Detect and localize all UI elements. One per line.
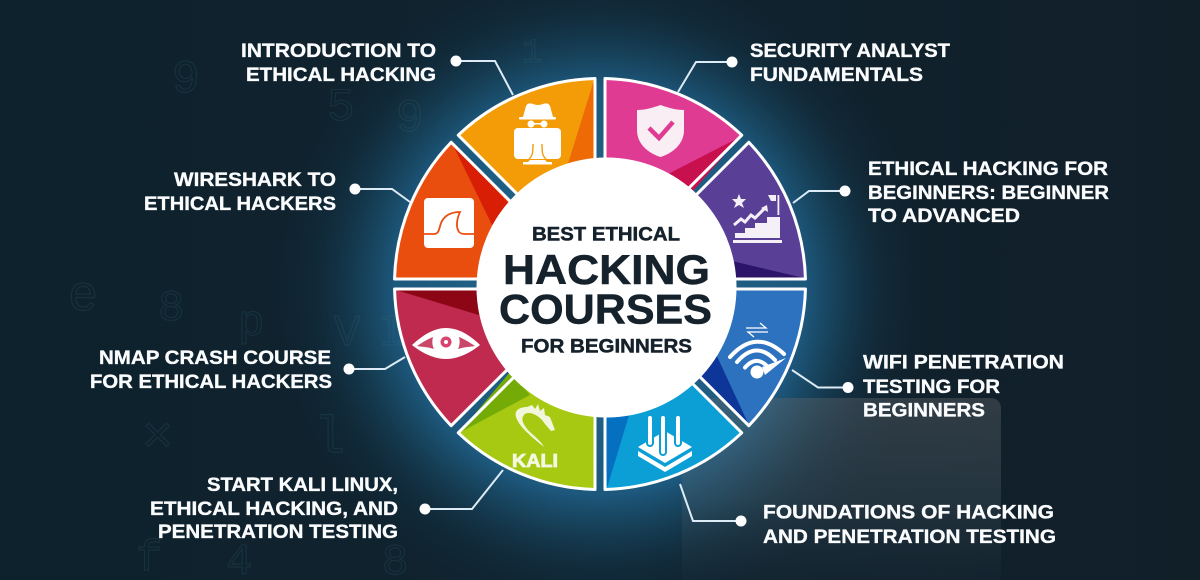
wedge: purple — [612, 142, 805, 279]
label: wifi: WIFI PENETRATION — [863, 352, 1064, 374]
background ghost characters: I — [378, 309, 404, 359]
label: ethical hacking for beginners: TO ADVANCED — [868, 205, 1020, 227]
background ghost characters — [68, 35, 542, 580]
background ghost characters: 5 — [327, 82, 355, 134]
connector: wireshark — [350, 184, 410, 202]
wedge: cyan — [605, 296, 742, 489]
wedge: pink — [605, 79, 742, 272]
icon: kali dragon and wordmark: KALI — [512, 451, 558, 471]
wedge: green — [458, 296, 595, 489]
label: introduction to ethical hacking: INTRODUCTION TO — [241, 40, 436, 62]
label: nmap: FOR ETHICAL HACKERS — [90, 371, 332, 393]
label: foundations: FOUNDATIONS OF HACKING — [763, 502, 1054, 524]
label: wireshark: WIRESHARK TO — [174, 169, 336, 191]
connector: security analyst fundamentals — [678, 56, 738, 92]
connector: nmap — [344, 357, 405, 374]
background ghost characters: 9 — [396, 93, 424, 145]
wedge: red — [395, 142, 588, 279]
background ghost characters: e — [68, 269, 98, 326]
background ghost characters: 1 — [522, 35, 542, 73]
icon: wireshark fin — [424, 198, 474, 248]
label: wifi: BEGINNERS — [863, 400, 985, 422]
label: security analyst: FUNDAMENTALS — [750, 64, 923, 86]
icon: hacker at monitor — [514, 103, 561, 164]
background ghost characters: × — [142, 409, 173, 468]
label: nmap: NMAP CRASH COURSE — [99, 347, 331, 369]
label: foundations: AND PENETRATION TESTING — [763, 526, 1056, 548]
icon: star and stairs progress — [732, 194, 782, 243]
label: introduction to ethical hacking — [241, 40, 436, 86]
icon: wifi speed gauge — [730, 323, 786, 378]
label: kali — [150, 474, 398, 543]
title: HACKING — [503, 246, 710, 293]
background ghost characters: 8 — [158, 284, 184, 334]
title: FOR BEGINNERS — [521, 336, 692, 358]
label: wireshark — [144, 169, 336, 215]
connector: introduction to ethical hacking — [450, 56, 513, 95]
connector: ethical hacking for beginners — [793, 186, 850, 203]
label: ethical hacking for beginners — [868, 158, 1109, 227]
label: nmap — [90, 347, 332, 393]
label: ethical hacking for beginners: BEGINNERS: BEGINNER — [868, 182, 1109, 204]
label: wireshark: ETHICAL HACKERS — [144, 193, 336, 215]
icon: eye — [412, 328, 480, 359]
wedge: blue — [612, 289, 805, 426]
background ghost characters: l — [314, 409, 345, 468]
label: kali: START KALI LINUX, — [207, 474, 398, 496]
background ghost characters: p — [238, 299, 264, 349]
label: wifi — [863, 352, 1064, 422]
label: introduction to ethical hacking: ETHICAL HACKING — [246, 64, 436, 86]
background ghost characters: V — [334, 309, 361, 359]
wedge: crimson — [395, 289, 588, 426]
background ghost characters: 9 — [172, 54, 200, 106]
title — [499, 224, 712, 358]
icon: kali dragon and wordmark — [512, 404, 558, 471]
connector: foundations — [680, 484, 746, 526]
connector: wifi — [792, 370, 854, 393]
label: wifi: TESTING FOR — [863, 376, 1000, 398]
title: BEST ETHICAL — [532, 224, 680, 246]
label: security analyst — [750, 40, 950, 86]
icon: shield check — [637, 105, 684, 157]
title: COURSES — [499, 286, 712, 332]
label: ethical hacking for beginners: ETHICAL HACKING FOR — [868, 158, 1108, 180]
label: security analyst: SECURITY ANALYST — [750, 40, 950, 62]
center circle — [476, 158, 736, 418]
wedge: orange — [458, 79, 595, 272]
icon: heat sink pins — [638, 416, 692, 472]
label: foundations — [763, 502, 1056, 548]
connector: kali — [420, 470, 503, 514]
label: kali: PENETRATION TESTING — [158, 521, 398, 543]
label: kali: ETHICAL HACKING, AND — [150, 498, 398, 520]
